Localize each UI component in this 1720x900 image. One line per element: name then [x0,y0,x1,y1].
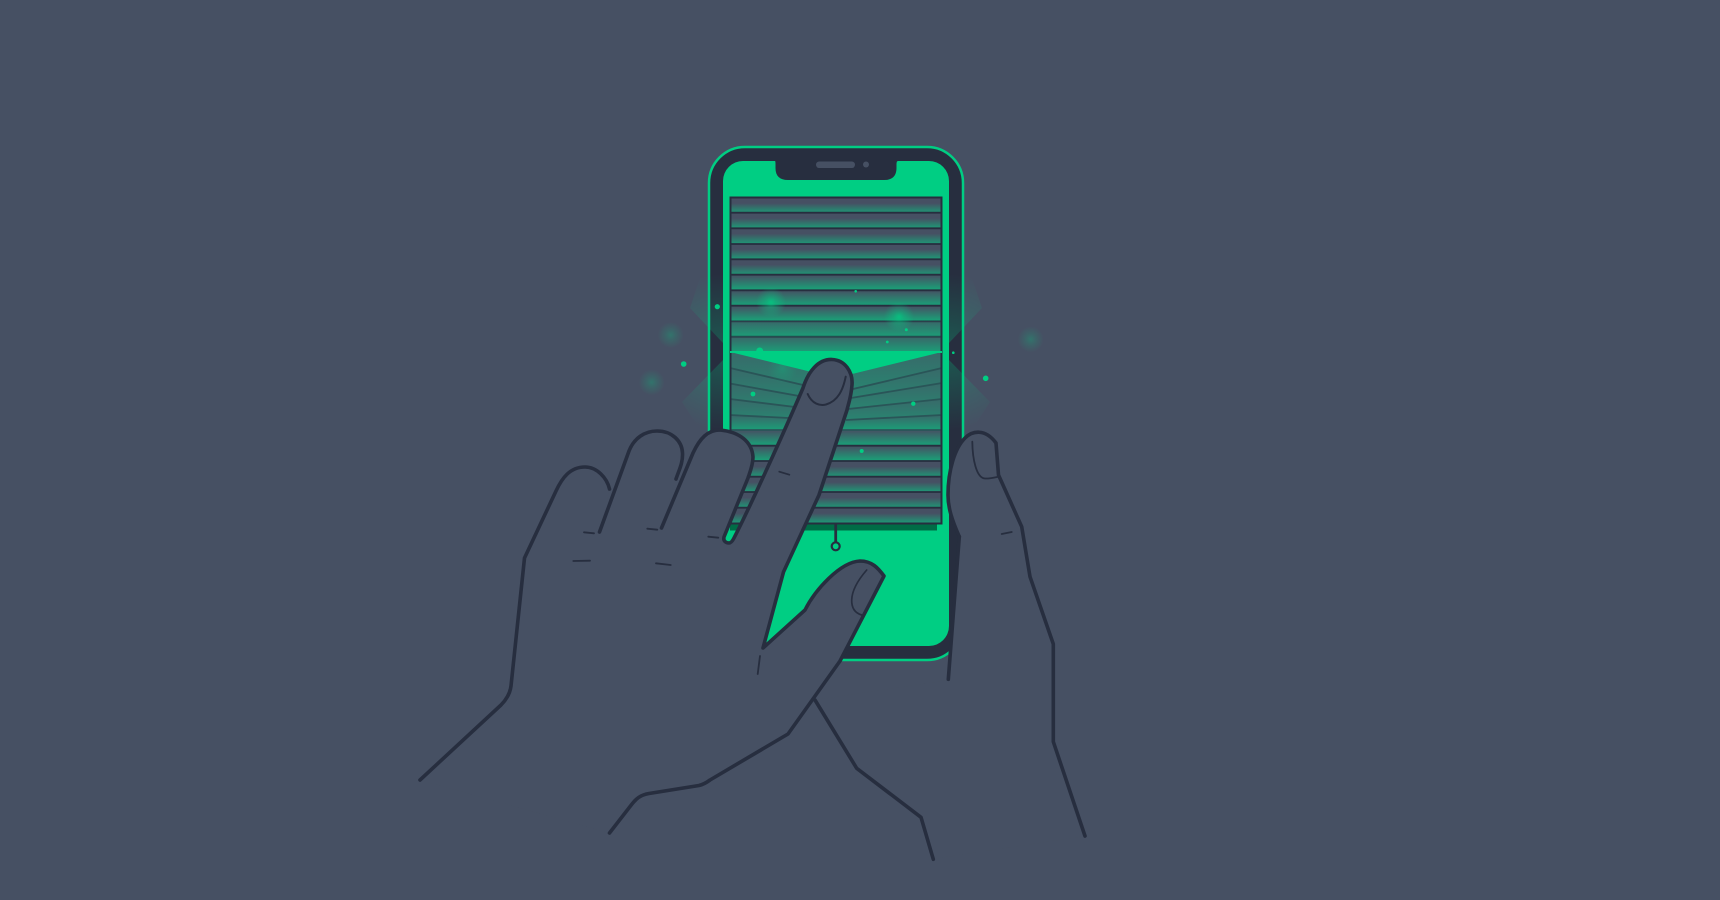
middle and index finger with thumb outline [610,359,884,833]
palm edge [948,537,959,679]
phone [682,147,990,660]
glowing particles [639,287,1044,453]
knuckle marks [573,472,789,674]
thumbnail [972,442,998,479]
thumb outline [948,432,1085,836]
phone body [709,147,963,660]
knuckle mark [1002,532,1012,534]
right hand [815,432,1085,859]
thumbnail [852,570,867,615]
left hand fill [420,359,884,833]
speaker [816,162,855,168]
blinds [730,197,942,524]
index fingernail [808,377,846,405]
opening top line [730,351,942,353]
phone outline [709,147,963,660]
left hand [420,359,884,833]
blind shadow [730,524,937,530]
light beams through the phone sides [682,272,990,432]
right hand fill [815,432,1085,859]
fanned slats [730,352,942,430]
slat lines [730,213,942,508]
upper slats [731,197,942,352]
notch [772,161,900,180]
camera [863,162,869,168]
green opening [730,352,942,378]
ring finger outline [600,431,683,532]
pinky outline [420,467,610,780]
lower slats [731,430,942,524]
pull cord [832,524,840,550]
blind frame [730,198,942,524]
screen [723,161,949,646]
wrist line [815,700,933,859]
